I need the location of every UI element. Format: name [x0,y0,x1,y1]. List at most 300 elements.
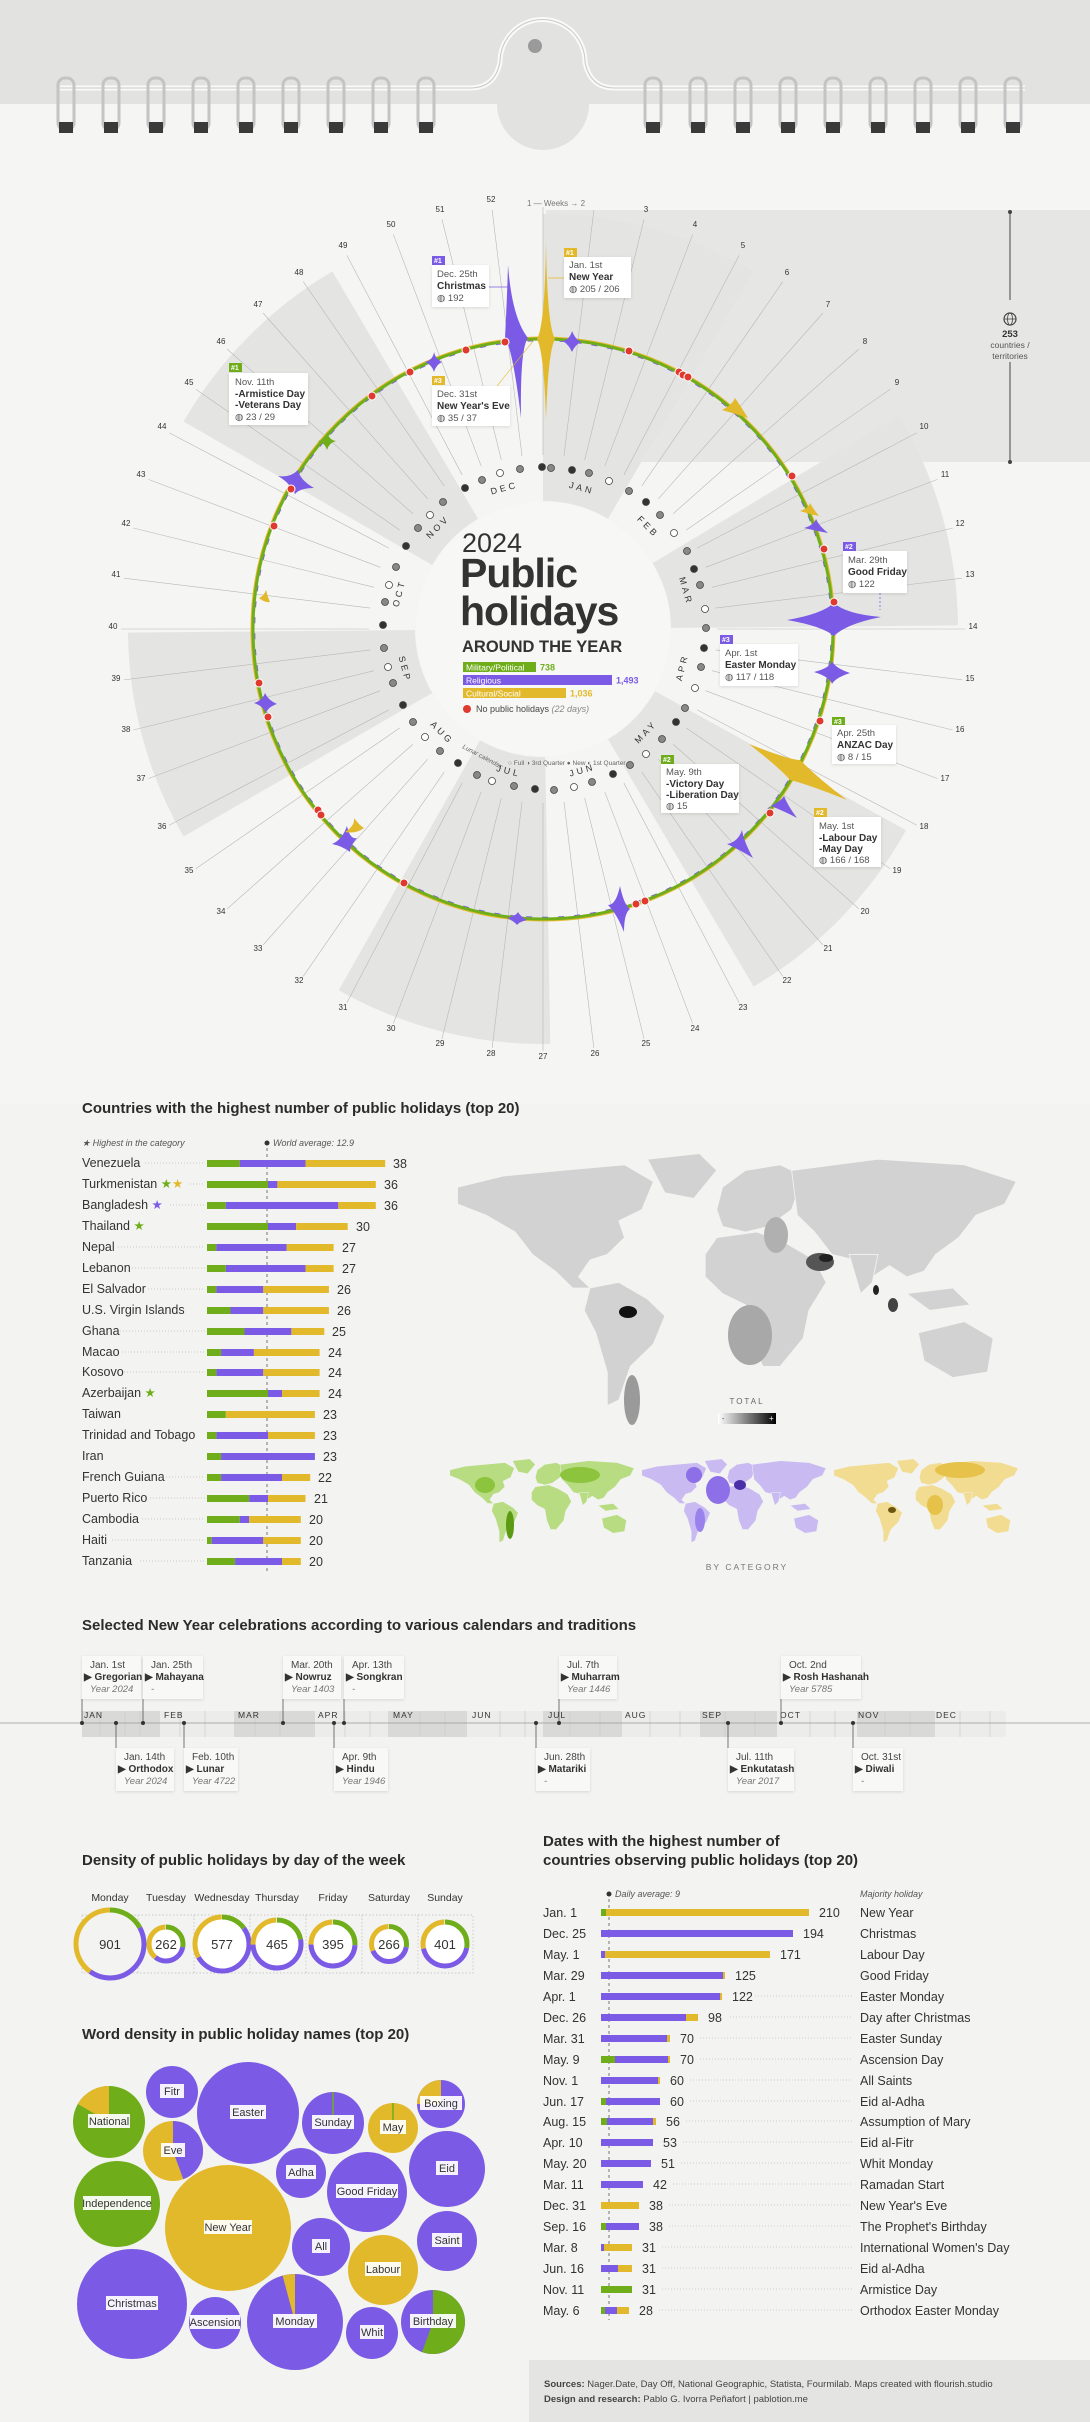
week labels: 5 [741,241,746,250]
week labels: 8 [863,337,868,346]
heading: top 20 dates [543,1833,858,1869]
callout: ANZAC Day: ANZAC Day [837,740,894,751]
week labels: 24 [691,1024,700,1033]
callout: Easter Monday [720,635,798,686]
bar chart: dates: Nov. 1 [543,2074,578,2088]
week labels: 30 [387,1024,396,1033]
bar chart: countries: 25 [332,1325,346,1339]
bar chart: dates: 98 [708,2011,722,2025]
bar chart: countries: 20 [309,1534,323,1548]
timeline labels: - [151,1684,154,1695]
chart: day of week rings: 465 [266,1937,288,1952]
chart: day of week rings: Sunday [427,1892,464,1904]
week labels: 25 [642,1039,651,1048]
callout: Labour Day: May. 1st [819,821,855,832]
week labels: 50 [387,220,396,229]
map: total holidays: + [769,1414,774,1423]
bar chart: dates: Mar. 11 [543,2178,584,2192]
bar chart: countries: Macao [82,1345,120,1359]
week labels: 19 [893,866,902,875]
timeline labels: Year 2024 [124,1776,167,1787]
bar chart: dates: Day after Christmas [860,2011,970,2025]
legend: categories: 738 [540,662,555,672]
bar chart: countries: 27 [342,1241,356,1255]
bar chart: countries: World average: 12.9 [273,1138,354,1148]
callout: Labour Day: ◍ 166 / 168 [819,855,870,866]
bar chart: dates: Ascension Day [860,2053,944,2067]
bar chart: countries: 20 [309,1513,323,1527]
timeline: New Year celebrations: JAN [84,1710,103,1720]
timeline: New Year celebrations: DEC [936,1710,957,1720]
month labels: APR [674,653,690,682]
maps: by category [450,1459,1018,1572]
bar chart: countries: ★ Highest in the category [82,1138,185,1148]
bar chart: dates: 28 [639,2304,653,2318]
week labels: 48 [295,268,304,277]
callout: Armistice Day: #1 [231,365,239,372]
callout: Good Friday: ◍ 122 [848,579,875,590]
callout: New Year's Eve: Dec. 31st [437,389,477,400]
timeline labels: Jul. 11th [736,1752,773,1763]
bubble chart: words: Eid [439,2163,455,2175]
bar chart: dates: Majority holiday [860,1889,923,1899]
bar chart: countries: 30 [356,1220,370,1234]
timeline labels: ▶ Mahayana [144,1672,204,1683]
callout: Victory Day: -Liberation Day [666,790,739,801]
footer: sources: Design and research: Pablo G. Ivorra Peñafort | pablotion.me [544,2394,808,2405]
callout: ANZAC Day: #3 [834,719,842,726]
week labels: 7 [826,300,831,309]
month labels: DEC [489,480,519,497]
bar chart: dates: 53 [663,2136,677,2150]
bar chart: dates: 194 [803,1927,824,1941]
bubble chart: words: May [383,2122,404,2134]
bar chart: countries: Tanzania [82,1554,132,1568]
map: total holidays: TOTAL [729,1397,765,1406]
maps: by category: BY CATEGORY [706,1562,788,1572]
callout: New Year's Eve: ◍ 35 / 37 [437,413,477,424]
timeline: New Year celebrations: FEB [164,1710,184,1720]
bar chart: dates: 38 [649,2199,663,2213]
bar chart: dates [543,1889,1010,2320]
bar chart: dates: Aug. 15 [543,2115,586,2129]
bubble chart: words: Independence [82,2198,152,2210]
bar chart: countries: Thailand ★ [82,1219,145,1233]
week labels: 51 [436,205,445,214]
callout: Good Friday: Good Friday [848,567,907,578]
panel: countries/territories counter [546,210,1090,464]
bar chart: dates: Mar. 31 [543,2032,585,2046]
bar chart: dates: 51 [661,2157,675,2171]
bar chart: dates: International Women's Day [860,2241,1010,2255]
bar chart: dates: Dec. 26 [543,2011,586,2025]
bar chart: countries: 26 [337,1283,351,1297]
timeline labels: Year 4722 [192,1776,236,1787]
chart: day of week rings: Monday [91,1892,129,1904]
week labels: 34 [217,907,226,916]
chart: day of week rings: 401 [434,1937,456,1952]
bar chart: dates: 56 [666,2115,680,2129]
month labels: JUL [495,763,522,779]
timeline: New Year celebrations: AUG [625,1710,646,1720]
bar chart: dates: May. 1 [543,1948,580,1962]
week labels: 33 [254,944,263,953]
bar chart: dates: 60 [670,2095,684,2109]
timeline labels: Year 1403 [291,1684,335,1695]
timeline labels: - [544,1776,547,1787]
week labels: 9 [895,378,900,387]
timeline labels: Jan. 1st [90,1660,125,1671]
callout: Victory Day [661,755,739,813]
bar chart: dates: Orthodox Easter Monday [860,2304,1000,2318]
month labels: JAN [568,480,596,496]
bar chart: dates: Sep. 16 [543,2220,586,2234]
timeline labels: ▶ Gregorian [83,1672,142,1683]
heading: top 20 dates: Dates with the highest number of [543,1833,781,1850]
title block: 2024 [462,528,522,558]
bar chart: dates: Jun. 16 [543,2262,584,2276]
week labels: 47 [254,300,263,309]
bar chart: dates: Jan. 1 [543,1906,577,1920]
timeline labels: ▶ Muharram [560,1672,620,1683]
callout: Christmas [432,256,508,307]
title block: Public [460,550,577,596]
week labels: 43 [137,470,146,479]
panel: countries/territories counter: 253 [1002,329,1018,340]
bar chart: dates: May. 20 [543,2157,587,2171]
timeline: New Year celebrations: JUN [472,1710,492,1720]
bar chart: dates: 38 [649,2220,663,2234]
bar chart: dates: Mar. 8 [543,2241,578,2255]
bar chart: countries: 27 [342,1262,356,1276]
bar chart: countries: Azerbaijan ★ [82,1386,156,1400]
legend: categories: 1,493 [616,676,639,686]
bar chart: dates: Whit Monday [860,2157,934,2171]
bar chart: countries: Kosovo [82,1365,124,1379]
bar chart: countries: 38 [393,1157,407,1171]
week labels: 21 [824,944,833,953]
lunar legend [461,744,626,771]
bar chart: countries: 23 [323,1429,337,1443]
callout: Armistice Day: -Veterans Day [235,400,302,411]
callout: Labour Day: -May Day [819,844,863,855]
bar chart: countries: Ghana [82,1324,120,1338]
bar chart: dates: Assumption of Mary [860,2115,971,2129]
timeline labels: ▶ Hindu [335,1764,375,1775]
bubble chart: words: Labour [366,2264,400,2276]
callout: Victory Day: May. 9th [666,767,702,778]
bar chart: countries: Cambodia [82,1512,139,1526]
heading: day of week density: Density of public holidays by day of the week [82,1852,406,1869]
bar chart: countries [82,1138,407,1572]
week labels: 22 [783,976,792,985]
timeline labels: ▶ Diwali [854,1764,895,1775]
week labels: 37 [137,774,146,783]
header: calendar binding [0,0,1090,1104]
callout: Christmas: Christmas [437,281,486,292]
chart: day of week rings: Saturday [368,1892,411,1904]
bar chart: countries: French Guiana [82,1470,165,1484]
bar chart: dates: Jun. 17 [543,2095,584,2109]
week labels: 44 [158,422,167,431]
callout: Good Friday: Mar. 29th [848,555,888,566]
week labels: 35 [185,866,194,875]
bar chart: dates: Easter Sunday [860,2032,943,2046]
chart: day of week rings [76,1892,473,1978]
timeline: New Year celebrations: JUL [548,1710,566,1720]
bar chart: dates: New Year's Eve [860,2199,947,2213]
bar chart: countries: Turkmenistan ★★ [82,1177,183,1191]
timeline labels: ▶ Orthodox [117,1764,174,1775]
callout: Christmas: Dec. 25th [437,269,478,280]
heading: word density: Word density in public holiday names (top 20) [82,2026,409,2043]
bar chart: dates: Eid al-Adha [860,2262,925,2276]
timeline labels: Year 5785 [789,1684,833,1695]
bar chart: countries: 21 [314,1492,328,1506]
callout: Easter Monday: Easter Monday [725,660,797,671]
week labels: 36 [158,822,167,831]
month labels: FEB [635,514,661,540]
callout: Armistice Day: -Armistice Day [235,389,305,400]
month labels: AUG [429,719,456,746]
bubble chart: words [73,2062,485,2370]
bar chart: dates: New Year [860,1906,914,1920]
timeline labels: ▶ Matariki [537,1764,586,1775]
timeline labels: Apr. 9th [342,1752,376,1763]
callout: Christmas: #1 [434,258,442,265]
callout: Good Friday [843,542,907,610]
timeline: New Year celebrations: NOV [858,1710,879,1720]
bar chart: countries: Bangladesh ★ [82,1198,163,1212]
callout: New Year [548,248,631,298]
callout: Victory Day: #2 [663,757,671,764]
bar chart: countries: Iran [82,1449,104,1463]
timeline: New Year celebrations: MAR [238,1710,260,1720]
timeline labels: ▶ Nowruz [284,1672,332,1683]
bar chart: dates: Apr. 10 [543,2136,583,2150]
chart: day of week rings: Wednesday [194,1892,250,1904]
chart: day of week rings: Thursday [255,1892,300,1904]
bubble chart: words: Sunday [314,2117,352,2129]
callout: New Year's Eve [432,340,534,426]
callout: Easter Monday: Apr. 1st [725,648,758,659]
bar chart: countries: 20 [309,1555,323,1569]
timeline: New Year celebrations: OCT [780,1710,801,1720]
timeline labels: Jan. 25th [151,1660,192,1671]
timeline labels: ▶ Songkran [345,1672,403,1683]
timeline labels: Year 2017 [736,1776,780,1787]
callout: New Year: Jan. 1st [569,260,603,271]
moon phase icons [380,464,710,794]
chart: day of week rings: Friday [318,1892,348,1904]
timeline: New Year celebrations: APR [318,1710,338,1720]
timeline labels: - [861,1776,864,1787]
bubble chart: words: Easter [232,2107,264,2119]
panel: countries/territories counter: countries / [990,340,1030,350]
timeline labels: Apr. 13th [352,1660,392,1671]
chart: day of week rings: 901 [99,1937,121,1952]
bar chart: countries: 24 [328,1387,342,1401]
bar chart: dates: 42 [653,2178,667,2192]
title block [460,528,622,656]
footer: sources: Sources: Nager.Date, Day Off, National Geographic, Statista, Fourmilab. Maps created with flourish.studio [544,2379,993,2390]
map: total holidays [458,1154,1016,1425]
bubble chart: words: Good Friday [337,2186,398,2198]
callout: New Year's Eve: New Year's Eve [437,401,510,412]
callout: ANZAC Day [832,717,896,764]
week labels: 1 — Weeks → 2 [527,199,586,208]
week labels: 52 [487,195,496,204]
bar chart: countries: Puerto Rico [82,1491,147,1505]
bar chart: countries: 22 [318,1471,332,1485]
holiday ring [252,338,834,920]
timeline labels: Year 1446 [567,1684,611,1695]
month sectors [128,214,958,1044]
bar chart: dates: 60 [670,2074,684,2088]
timeline labels: ▶ Enkutatash [729,1764,794,1775]
bar chart: countries: 24 [328,1366,342,1380]
bubble chart: words: Birthday [413,2316,454,2328]
bar chart: dates: Eid al-Fitr [860,2136,913,2150]
title block: AROUND THE YEAR [462,638,622,656]
callout: New Year: ◍ 205 / 206 [569,284,620,295]
bubble chart: words: Boxing [424,2098,458,2110]
bar chart: dates: 210 [819,1906,840,1920]
legend: categories: No public holidays (22 days) [476,704,589,714]
week labels: 31 [339,1003,348,1012]
timeline labels: ▶ Rosh Hashanah [782,1672,869,1683]
timeline labels: Oct. 31st [861,1752,901,1763]
bubble chart: words: Christmas [107,2298,157,2310]
bubble chart: words: Whit [361,2327,383,2339]
week labels: 10 [920,422,929,431]
week labels: 49 [339,241,348,250]
bubble chart: words: Eve [164,2145,182,2157]
week labels: 38 [122,725,131,734]
bar chart: dates: 125 [735,1969,756,1983]
timeline labels: Mar. 20th [291,1660,333,1671]
week labels: 14 [969,622,978,631]
map: total holidays: - [722,1416,725,1423]
callout: New Year: #1 [566,250,574,257]
week labels: 26 [591,1049,600,1058]
week radial lines [121,207,965,1051]
month labels [391,480,695,779]
bar chart: countries: Trinidad and Tobago [82,1428,195,1442]
legend: categories: Religious [466,676,501,686]
bubble chart: words: All [315,2241,327,2253]
week labels: 40 [109,622,118,631]
week labels: 11 [941,470,950,479]
timeline labels: Jul. 7th [567,1660,599,1671]
lunar legend: Lunar calendar: [461,744,504,771]
week labels: 13 [966,570,975,579]
week labels: 18 [920,822,929,831]
week labels: 46 [217,337,226,346]
bubble chart: words: National [89,2116,129,2128]
bar chart: dates: Mar. 29 [543,1969,585,1983]
timeline labels: Oct. 2nd [789,1660,827,1671]
bar chart: dates: The Prophet's Birthday [860,2220,988,2234]
bar chart: dates: 70 [680,2032,694,2046]
chart: day of week rings: Tuesday [146,1892,187,1904]
bar chart: countries: 26 [337,1304,351,1318]
bar chart: dates: Eid al-Adha [860,2095,925,2109]
callout: Labour Day [814,808,881,867]
bar chart: countries: Nepal [82,1240,115,1254]
bubble chart: words: Fitr [164,2086,180,2098]
bar chart: dates: Nov. 11 [543,2283,584,2297]
week labels [109,195,978,1061]
lunar legend: ○ Full ◑ 3rd Quarter ● New ◐ 1st Quarter [508,760,626,767]
bar chart: countries: 36 [384,1178,398,1192]
callout: New Year: New Year [569,272,613,283]
callout: New Year's Eve: #3 [434,378,442,385]
callout: Victory Day: -Victory Day [666,779,725,790]
week labels: 12 [956,519,965,528]
bar chart: dates: Daily average: 9 [615,1889,680,1899]
callout: Easter Monday: #3 [722,637,730,644]
bar chart: dates: 31 [642,2241,656,2255]
legend: categories: Military/Political [466,662,525,672]
legend: categories: 1,036 [570,688,593,698]
month labels: MAY [633,718,659,745]
bar chart: dates: Apr. 1 [543,1990,576,2004]
month labels: OCT [391,578,408,608]
week labels: 16 [956,725,965,734]
bar chart: countries: 36 [384,1199,398,1213]
bar chart: countries: U.S. Virgin Islands [82,1303,185,1317]
callout: ANZAC Day: Apr. 25th [837,728,875,739]
bar chart: dates: All Saints [860,2074,912,2088]
week labels: 15 [966,674,975,683]
bubble chart: words: Monday [275,2316,315,2328]
month labels: JUN [568,762,596,779]
bar chart: dates: Christmas [860,1927,916,1941]
bar chart: dates: Armistice Day [860,2283,938,2297]
bar chart: dates: May. 6 [543,2304,580,2318]
heading: New Year celebrations: Selected New Year celebrations according to various calendars and traditions [82,1617,636,1634]
spikes [254,240,881,932]
week labels: 17 [941,774,950,783]
callout: Armistice Day: Nov. 11th [235,377,274,388]
heading: top 20 dates: countries observing public holidays (top 20) [543,1852,858,1869]
panel: countries/territories counter: territories [992,351,1028,361]
timeline labels: Year 1946 [342,1776,386,1787]
chart: day of week rings: 577 [211,1937,233,1952]
callout: Victory Day: ◍ 15 [666,801,688,812]
timeline: New Year celebrations: MAY [393,1710,414,1720]
callout: Easter Monday: ◍ 117 / 118 [725,672,774,683]
bar chart: dates: 31 [642,2283,656,2297]
bar chart: dates: 122 [732,1990,753,2004]
bar chart: dates: Ramadan Start [860,2178,945,2192]
bar chart: dates: 171 [780,1948,801,1962]
week labels: 28 [487,1049,496,1058]
bar chart: countries: 23 [323,1408,337,1422]
bar chart: countries: Venezuela [82,1156,140,1170]
legend: categories [463,662,639,714]
month labels: MAR [677,576,695,606]
week labels: 27 [539,1052,548,1061]
footer: sources [529,2360,1090,2422]
bar chart: dates: Dec. 31 [543,2199,586,2213]
title block: holidays [460,588,619,634]
week labels: 4 [693,220,698,229]
bar chart: countries: Taiwan [82,1407,121,1421]
callout: Labour Day: -Labour Day [819,833,878,844]
week labels: 32 [295,976,304,985]
